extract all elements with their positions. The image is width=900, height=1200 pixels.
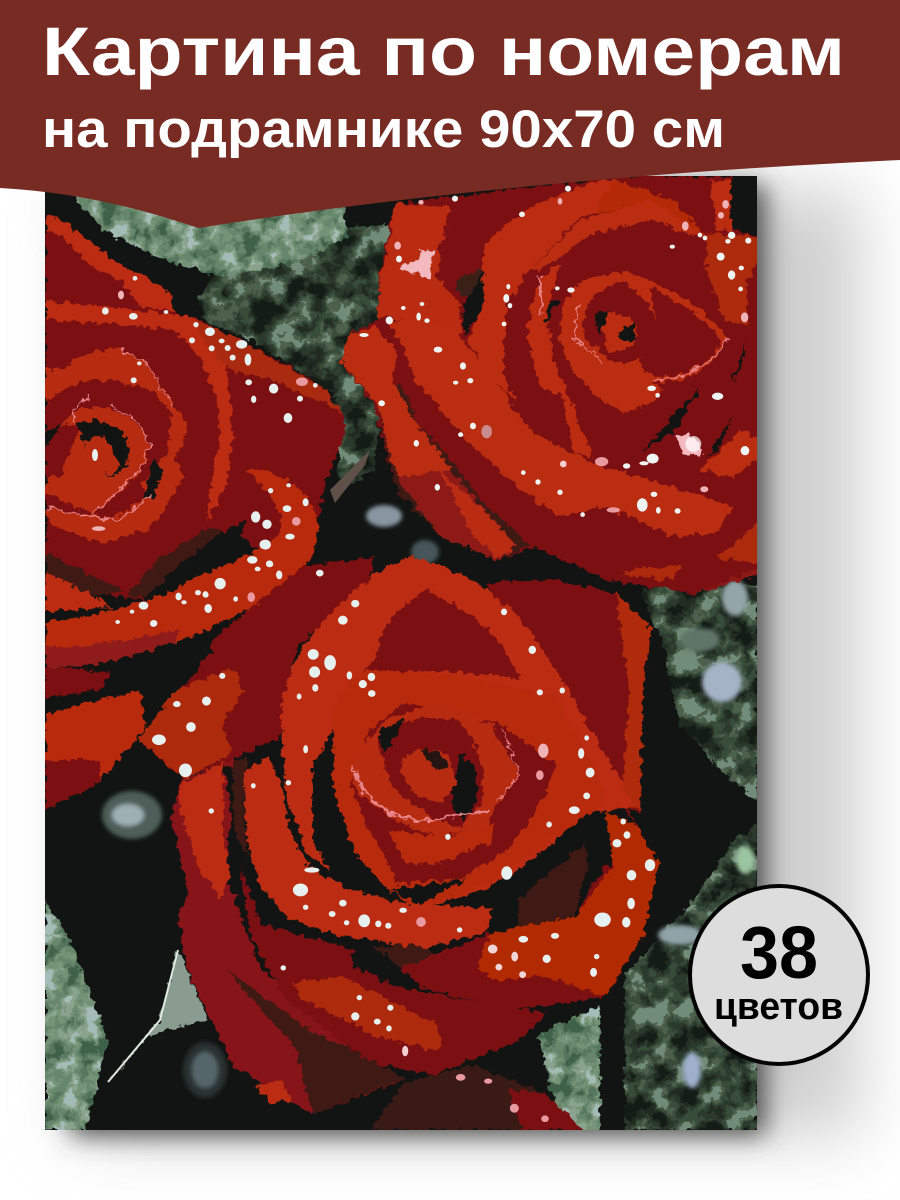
title line 2: на подрамнике 90x70 см <box>42 100 725 159</box>
rose: lower left fragment <box>45 668 112 697</box>
rose: upper right <box>342 177 763 593</box>
title line 1: Картина по номерам <box>42 13 845 90</box>
badge number: 38 <box>740 911 818 994</box>
badge label: цветов <box>714 986 843 1028</box>
canvas shadow <box>70 185 860 1135</box>
header banner <box>0 0 900 228</box>
leaves and background foliage <box>45 178 757 1130</box>
stem fragment <box>330 450 370 503</box>
rose: upper left <box>45 215 345 810</box>
canvas painting: red roses <box>45 176 763 1130</box>
badge: 38 colours <box>690 886 868 1064</box>
rose: bottom centre <box>139 540 659 1130</box>
